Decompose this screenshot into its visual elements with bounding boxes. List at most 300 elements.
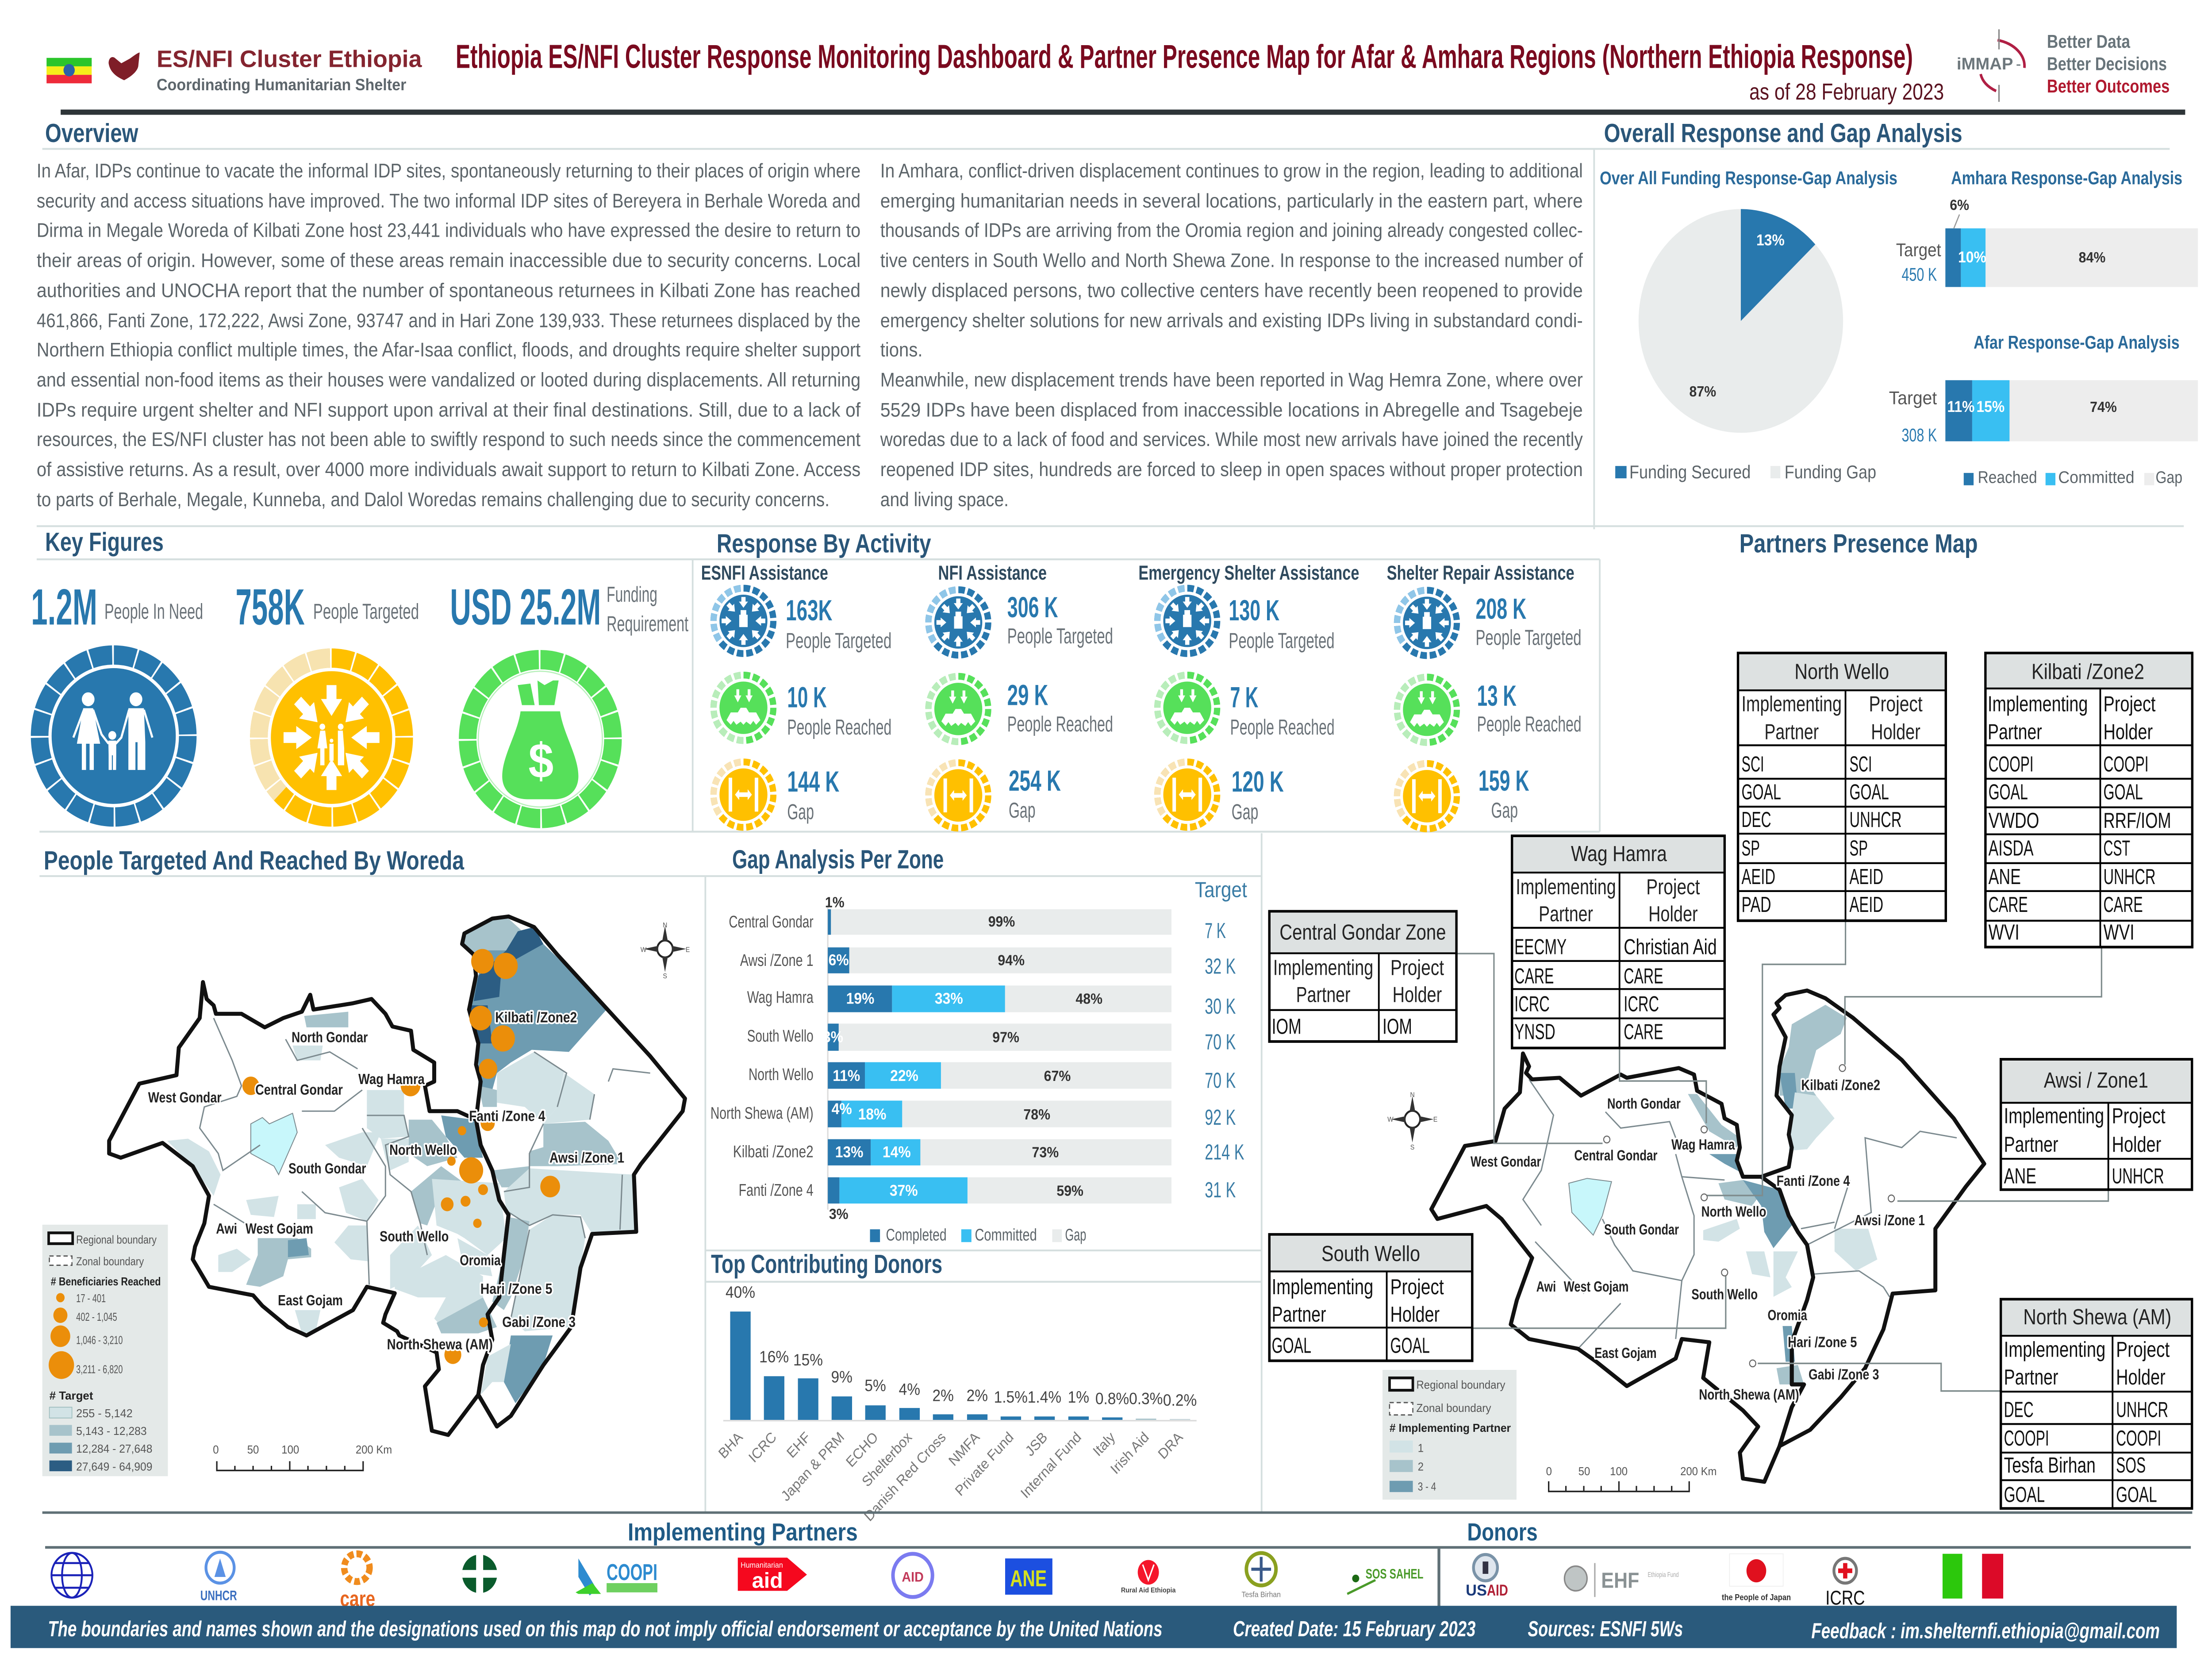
text block: Amhara situation: tive centers in South Wello and North Shewa Zone. In response to the increased number of	[880, 250, 1583, 272]
table: North Shewa: GOAL	[2004, 1483, 2045, 1507]
logo: circle seal: AID	[902, 1569, 924, 1585]
bar chart: Amhara: 10%	[1958, 249, 1986, 266]
map labels: Awsi /Zone 1	[549, 1149, 624, 1166]
bar chart: Amhara: Target	[1896, 240, 1941, 260]
key figure: people targeted: 758K	[236, 579, 305, 635]
icon: compass: E	[686, 946, 690, 954]
map labels: partner map: West Gojam	[1564, 1278, 1628, 1295]
map labels: South Gondar	[288, 1160, 366, 1177]
bar chart: donors: 9%	[831, 1368, 853, 1386]
column: NFI assistance: People Targeted	[1007, 624, 1113, 648]
table: Wag Hamra: Implementing	[1516, 875, 1616, 899]
icon: compass: W	[641, 946, 647, 954]
text block: Afar situation: authorities and UNOCHA report that the number of spontaneous returnees in Kilbati Zone has reached	[37, 280, 860, 302]
heading: key figures: Key Figures	[45, 528, 164, 557]
map labels: Wag Hamra	[358, 1071, 425, 1087]
target values: 214 K	[1205, 1140, 1244, 1164]
bar chart: Amhara	[1896, 168, 2198, 287]
table: Wag Hamra: Holder	[1648, 902, 1698, 926]
bar chart: donors: 16%	[759, 1348, 789, 1366]
map legend: 3,211 - 6,820	[76, 1363, 123, 1376]
map legend: Zonal boundary	[76, 1255, 144, 1268]
table: Wag Hamra: Christian Aid	[1624, 935, 1717, 959]
table: Kilbati Zone2: VWDO	[1989, 808, 2039, 832]
column: emergency shelter assistance: 7 K	[1230, 681, 1258, 714]
map legend: 27,649 - 64,909	[76, 1460, 152, 1473]
panel: overall response and gap analysis	[1600, 119, 2198, 487]
bar chart: donors: 0.3%	[1129, 1390, 1163, 1408]
text block: Amhara situation: reopened IDP sites, hundreds are forced to sleep in open spaces without proper protection	[880, 458, 1583, 481]
table: Wag Hamra: CARE	[1514, 964, 1554, 988]
key figure: funding requirement: USD 25.2M	[450, 579, 601, 635]
map labels: Hari /Zone 5	[480, 1280, 552, 1297]
map labels: partner map: Fanti /Zone 4	[1777, 1173, 1850, 1189]
icon: compass partner map: E	[1433, 1116, 1437, 1123]
panel: top contributing donors	[711, 1250, 1197, 1524]
stacked bar chart: gap by zone: 59%	[1056, 1182, 1083, 1199]
table: North Wello: Implementing	[1742, 692, 1842, 716]
logo: red figure: Rural Aid Ethiopia	[1121, 1586, 1176, 1594]
stacked bar chart: gap by zone	[710, 894, 1171, 1222]
table: Central Gondar Zone: Central Gondar Zone	[1279, 920, 1446, 944]
table: Wag Hamra: CARE	[1624, 1020, 1663, 1044]
map labels: Fanti /Zone 4	[469, 1107, 545, 1124]
map legend: 12,284 - 27,648	[76, 1442, 152, 1456]
key figure: funding requirement: Requirement	[607, 611, 688, 636]
text block: Afar situation: IDPs require urgent shelter and NFI support upon arrival at their final destinations. Still, due to a lack of	[37, 399, 860, 421]
logo: humanitarian aid: Humanitarian	[741, 1561, 783, 1569]
table: Kilbati Zone2: CST	[2103, 836, 2130, 860]
map labels: partner map: Central Gondar	[1574, 1147, 1657, 1164]
panel: response by activity	[701, 529, 1582, 829]
logo: humanitarian aid: aid	[752, 1569, 783, 1592]
column: NFI assistance: 254 K	[1009, 765, 1061, 797]
stacked bar chart: gap by zone: 48%	[1075, 990, 1102, 1007]
text block: Afar situation: to parts of Berhale, Megale, Kunneba, and Dalol Woredas remains challenging due to security concerns.	[37, 488, 830, 511]
table: Kilbati Zone2: Partner	[1988, 720, 2042, 744]
bar chart: donors: Japan & PRM	[778, 1429, 847, 1504]
heading: response by activity: Response By Activity	[717, 529, 931, 558]
disclaimer: The boundaries and names shown and the designations used on this map do not imply official endorsement or acceptance by the United Nations	[48, 1617, 1163, 1641]
map legend: # Beneficiaries Reached	[51, 1275, 161, 1288]
key figure: people in need: 1.2M	[31, 579, 97, 635]
stacked bar chart: gap by zone: 73%	[1032, 1144, 1059, 1161]
pie legend: Funding Secured	[1629, 462, 1751, 482]
bar chart: donors: Italy	[1090, 1429, 1118, 1459]
column: ESNFI assistance: 10 K	[787, 681, 827, 714]
bar chart: Amhara: 84%	[2079, 249, 2105, 265]
icon: compass: S	[663, 972, 667, 980]
logo: ICRC	[1825, 1558, 1865, 1609]
stacked bar chart: gap by zone: 3%	[829, 1206, 849, 1222]
map labels: West Gondar	[148, 1089, 222, 1106]
scale bar: 0	[213, 1443, 219, 1456]
scale bar partner map: 50	[1578, 1465, 1590, 1478]
table: Kilbati Zone2: Implementing	[1988, 692, 2088, 716]
map labels: partner map: North Wello	[1701, 1203, 1766, 1220]
stacked bar chart: gap by zone: 22%	[890, 1068, 918, 1084]
key figure: funding requirement: Funding	[607, 582, 657, 606]
heading: top donors: Top Contributing Donors	[711, 1250, 942, 1279]
logo: iMMAP	[1957, 29, 2170, 102]
target column heading: Target	[1195, 878, 1247, 902]
cluster name: ES/NFI Cluster Ethiopia	[157, 46, 422, 72]
text block: Afar situation: security and access situations have improved. The two informal IDP sites of Bereyera in Berhale Woreda and	[37, 190, 860, 212]
icon: compass	[641, 921, 690, 980]
table: North Wello: Project	[1869, 692, 1923, 716]
table: Wag Hamra: Partner	[1539, 902, 1593, 926]
table: Awsi Zone1: Implementing	[2004, 1104, 2104, 1128]
map legend	[42, 1225, 168, 1476]
stacked bar chart: gap by zone: Wag Hamra	[747, 988, 814, 1007]
text block: Afar situation: of assistive returns. As a result, over 4000 more individuals await support to return to Kilbati Zone. Access	[37, 458, 860, 481]
table: North Wello: Partner	[1764, 720, 1819, 744]
logo: EHF	[1564, 1563, 1679, 1597]
table: Kilbati Zone2: UNHCR	[2103, 865, 2155, 889]
column: shelter repair assistance: 13 K	[1477, 680, 1517, 712]
text block: Afar situation	[37, 160, 860, 511]
map labels: partner map: Awi	[1536, 1278, 1556, 1295]
panel: gap analysis per zone	[710, 845, 1247, 1244]
table: Wag Hamra: YNSD	[1514, 1020, 1555, 1044]
table: Central Gondar Zone: IOM	[1382, 1015, 1412, 1038]
stacked bar chart: gap by zone: 3%	[823, 1029, 843, 1046]
table: Awsi Zone1: Holder	[2112, 1132, 2161, 1157]
table: North Shewa: SOS	[2116, 1453, 2146, 1477]
pie legend: Funding Gap	[1785, 462, 1876, 482]
bar chart: donors: ICRC	[745, 1429, 780, 1466]
key figure: people targeted: People Targeted	[313, 600, 419, 623]
column: NFI assistance: 29 K	[1007, 679, 1048, 711]
table: Awsi Zone1	[2001, 1059, 2192, 1190]
text block: Amhara situation: emergency shelter solutions for new arrivals and existing IDPs living in substandard condi-	[880, 310, 1583, 332]
map legend: 17 - 401	[76, 1292, 106, 1305]
table: Central Gondar Zone	[1269, 911, 1456, 1042]
stacked bar chart: gap by zone: 67%	[1044, 1068, 1071, 1084]
table: South Wello: Implementing	[1272, 1275, 1373, 1299]
bar chart: donors: 0.2%	[1163, 1392, 1197, 1409]
table: Awsi Zone1: Project	[2112, 1104, 2166, 1128]
logo: USAID: US	[1466, 1582, 1487, 1599]
logo: olive ring: Tesfa Birhan	[1242, 1590, 1281, 1599]
report date: as of 28 February 2023	[1749, 79, 1944, 104]
bar chart: donors: NMFA	[945, 1428, 983, 1469]
table: Kilbati Zone2: CARE	[1989, 892, 2028, 916]
table: North Shewa: DEC	[2004, 1398, 2034, 1422]
bar chart: donors: Danish Red Cross	[861, 1429, 949, 1524]
map labels: partner map: South Gondar	[1604, 1221, 1679, 1238]
map legend: 402 - 1,045	[76, 1311, 117, 1323]
logo: SOS Sahel	[1347, 1566, 1423, 1594]
logo: EHF: EHF	[1601, 1569, 1639, 1592]
gap chart legend: Completed	[886, 1225, 947, 1244]
column: ESNFI assistance: 144 K	[787, 766, 839, 798]
logo: CARE: care	[340, 1587, 375, 1611]
logo: ICRC: ICRC	[1825, 1587, 1865, 1609]
table: North Wello: UNHCR	[1849, 808, 1901, 832]
bar chart: donors: 1%	[1068, 1388, 1089, 1406]
scale bar: 100	[281, 1443, 299, 1456]
table: Kilbati Zone2: AISDA	[1989, 836, 2034, 860]
bar chart: donors: Internal Fund	[1018, 1429, 1084, 1501]
logo: circle seal	[893, 1554, 933, 1597]
bar chart: Amhara: Amhara Response-Gap Analysis	[1951, 168, 2182, 188]
target values: 7 K	[1205, 919, 1226, 943]
scale bar partner map: 100	[1610, 1465, 1628, 1478]
key figure: people in need	[31, 579, 203, 635]
partner map legend: # Implementing Partner	[1390, 1422, 1511, 1434]
scale bar partner map	[1546, 1465, 1717, 1492]
icon: targeted people	[259, 658, 404, 817]
map labels: partner map: North Shewa (AM)	[1699, 1386, 1799, 1403]
bar chart: donors: Irish Aid	[1107, 1429, 1152, 1477]
column: ESNFI assistance: Gap	[787, 800, 814, 824]
logo: Japan	[1722, 1554, 1791, 1602]
table: South Wello: Partner	[1272, 1302, 1326, 1327]
stacked bar chart: gap by zone: 94%	[998, 952, 1025, 969]
text block: Amhara situation	[880, 160, 1583, 511]
table: North Wello: North Wello	[1794, 660, 1889, 684]
table: North Shewa: UNHCR	[2116, 1398, 2168, 1422]
map labels: partner map: Kilbati /Zone2	[1801, 1077, 1880, 1093]
map legend: 5,143 - 12,283	[76, 1425, 147, 1438]
connector lines	[1456, 921, 2108, 1391]
bar chart: donors: DRA	[1155, 1428, 1186, 1462]
stacked bar chart: gap by zone: 18%	[858, 1106, 887, 1123]
map labels: Kilbati /Zone2	[495, 1009, 577, 1026]
stacked bar chart: gap by zone: 13%	[835, 1144, 864, 1161]
map labels: partner map: Wag Hamra	[1671, 1136, 1735, 1153]
column: NFI assistance	[929, 562, 1113, 828]
stacked bar chart: gap by zone: 99%	[988, 913, 1015, 930]
map labels: East Gojam	[278, 1292, 343, 1309]
map labels: Oromia	[460, 1252, 501, 1269]
icon: compass partner map: N	[1410, 1091, 1415, 1099]
bar chart: Amhara: 450 K	[1901, 265, 1937, 285]
logo: Japan: the People of Japan	[1722, 1592, 1791, 1602]
icon: Ethiopia flag	[46, 58, 92, 83]
logo: iMMAP: -	[2016, 54, 2021, 73]
bar chart: donors: 2%	[967, 1387, 988, 1405]
table: Wag Hamra	[1512, 836, 1724, 1048]
column: ESNFI assistance: People Targeted	[786, 629, 891, 653]
column: shelter repair assistance: Gap	[1491, 798, 1518, 823]
bar chart: donors: 1.5%	[994, 1388, 1028, 1406]
text block: Afar situation: their areas of origin. However, some of these areas remain inaccessible due to security concerns. Local	[37, 250, 860, 272]
table: Central Gondar Zone: Holder	[1393, 983, 1442, 1007]
bar legend: Gap	[2155, 468, 2182, 487]
logo: green cross	[462, 1554, 497, 1594]
map labels: partner map: East Gojam	[1594, 1345, 1657, 1361]
footer	[11, 1606, 2177, 1648]
bar chart: donors: JSB	[1022, 1429, 1050, 1459]
table: North Wello: DEC	[1742, 808, 1771, 832]
stacked bar chart: gap by zone: 4%	[832, 1101, 852, 1118]
map: partner presence	[1431, 991, 1984, 1482]
sources: Sources: ESNFI 5Ws	[1528, 1617, 1683, 1641]
panel: donors	[1466, 1519, 2003, 1609]
icon: compass: N	[663, 921, 667, 929]
column: emergency shelter assistance: Gap	[1232, 800, 1258, 824]
stacked bar chart: gap by zone: 33%	[935, 990, 963, 1007]
map labels: Gabi /Zone 3	[502, 1314, 576, 1330]
target values: 70 K	[1205, 1069, 1236, 1092]
logo: olive ring	[1242, 1553, 1281, 1599]
table: Awsi Zone1: Awsi / Zone1	[2044, 1068, 2148, 1092]
column: shelter repair assistance: 208 K	[1475, 593, 1526, 625]
map labels: South Wello	[380, 1228, 449, 1245]
table: Kilbati Zone2: COOPI	[2103, 752, 2149, 776]
bar chart: donors: Shelterbox	[859, 1429, 915, 1490]
panel: implementing partners	[51, 1519, 1423, 1611]
text block: Afar situation: resources, the ES/NFI cluster has not been able to swiftly respond to such needs since the commencement	[37, 428, 860, 450]
stacked bar chart: gap by zone: Awsi /Zone 1	[740, 951, 814, 969]
bar chart: Afar: 11%	[1947, 399, 1974, 415]
heading: implementing partners: Implementing Partners	[628, 1519, 858, 1546]
table: South Wello: GOAL	[1272, 1334, 1311, 1357]
table: South Wello	[1269, 1234, 1472, 1361]
bar chart: Afar: Target	[1889, 388, 1937, 408]
column: shelter repair assistance: People Reached	[1477, 712, 1582, 736]
table: North Wello: SCI	[1742, 752, 1764, 776]
table: Kilbati Zone2: Holder	[2103, 720, 2153, 744]
map labels: partner map: North Gondar	[1607, 1095, 1681, 1112]
logo: USAID	[1466, 1554, 1508, 1599]
logo: IOM	[51, 1553, 92, 1598]
bar chart: donors: 1.4%	[1028, 1388, 1061, 1406]
text block: Amhara situation: 5529 IDPs have been displaced from inaccessible locations in Abregelle and Tsagebeje	[880, 399, 1583, 421]
icon: family	[40, 655, 188, 817]
table: North Wello: AEID	[1849, 892, 1883, 916]
table: North Shewa: Implementing	[2004, 1338, 2105, 1361]
table: South Wello: Holder	[1390, 1302, 1440, 1327]
bar chart: donors: EHF	[783, 1429, 813, 1461]
table: Awsi Zone1: Partner	[2004, 1132, 2058, 1157]
heading: funding pie: Over All Funding Response-Gap Analysis	[1600, 168, 1897, 188]
table: North Shewa: GOAL	[2116, 1483, 2157, 1507]
bar chart: donors: ECHO	[843, 1429, 881, 1470]
table: Kilbati Zone2: GOAL	[1989, 780, 2028, 804]
column: ESNFI assistance	[701, 562, 891, 827]
column: shelter repair assistance	[1387, 562, 1582, 829]
logo: iMMAP: Better Data	[2047, 32, 2131, 52]
table: North Shewa: Project	[2116, 1338, 2170, 1361]
table: North Shewa: North Shewa (AM)	[2023, 1305, 2171, 1329]
table: Central Gondar Zone: IOM	[1272, 1015, 1302, 1038]
icon: money bag: $	[529, 733, 553, 788]
bar chart: donors: 40%	[726, 1283, 755, 1301]
stacked bar chart: gap by zone: North Shewa (AM)	[710, 1104, 814, 1123]
column: emergency shelter assistance	[1138, 562, 1359, 827]
pie chart: funding: 87%	[1690, 383, 1716, 400]
text block: Amhara situation: Meanwhile, new displacement trends have been reported in Wag Hemra Zone, where over	[880, 369, 1583, 391]
text block: Amhara situation: and living space.	[880, 488, 1009, 511]
table: North Wello: AEID	[1849, 865, 1883, 889]
table: North Wello: GOAL	[1849, 780, 1889, 804]
bar chart: donors: 2%	[933, 1387, 954, 1405]
logo: CARE	[340, 1554, 375, 1611]
panel: people targeted and reached by woreda	[42, 846, 690, 1476]
stacked bar chart: gap by zone: Central Gondar	[729, 912, 814, 931]
logo: SOS Sahel: SOS SAHEL	[1366, 1566, 1423, 1582]
text block: Afar situation: Dirma in Megale Woreda of Kilbati Zone host 23,441 individuals who have expressed the desire to return to	[37, 219, 860, 242]
table: Wag Hamra: Project	[1646, 875, 1700, 899]
map labels: North Gondar	[292, 1029, 368, 1046]
table: North Wello: SP	[1742, 836, 1760, 860]
text block: Amhara situation: emerging humanitarian needs in several locations, particularly in the eastern part, where	[880, 190, 1583, 212]
stacked bar chart: gap by zone: 37%	[890, 1182, 918, 1200]
scale bar	[213, 1443, 392, 1470]
heading: people targeted map: People Targeted And Reached By Woreda	[44, 846, 464, 876]
scale bar partner map: 0	[1546, 1465, 1552, 1478]
logo: iMMAP: Better Decisions	[2047, 54, 2167, 74]
heading: gap analysis: Gap Analysis Per Zone	[732, 845, 944, 874]
column: emergency shelter assistance: Emergency Shelter Assistance	[1138, 562, 1359, 584]
logo: iMMAP: iMMAP	[1957, 54, 2013, 73]
logo: ANE	[1005, 1558, 1052, 1595]
text block: Amhara situation: woredas due to a lack of food and services. While most new arrivals have joined the recently	[880, 428, 1583, 450]
icon: compass partner map	[1387, 1091, 1437, 1151]
table: North Shewa: COOPI	[2004, 1426, 2049, 1450]
bar chart: Afar: 15%	[1976, 399, 2005, 415]
header	[46, 29, 2170, 104]
target values: 70 K	[1205, 1030, 1236, 1054]
bar legend	[1964, 468, 2182, 487]
partner map legend: 2	[1418, 1460, 1424, 1473]
icon: shelter cluster logo	[109, 53, 140, 80]
text block: Amhara situation: thousands of IDPs are arriving from the Oromia region and joining already congested collec-	[880, 219, 1583, 242]
panel: partners presence map	[1269, 529, 2192, 1508]
bar chart: donors: 15%	[793, 1351, 823, 1369]
table: North Shewa: COOPI	[2116, 1426, 2161, 1450]
table: Kilbati Zone2: WVI	[2103, 920, 2135, 944]
stacked bar chart: gap by zone: 1%	[825, 894, 845, 911]
column: emergency shelter assistance: People Targeted	[1229, 629, 1335, 653]
partner map legend: Regional boundary	[1417, 1379, 1505, 1392]
table: Wag Hamra: EECMY	[1514, 935, 1567, 959]
partner map legend: 1	[1418, 1442, 1424, 1455]
table: Kilbati Zone2: GOAL	[2103, 780, 2143, 804]
map labels: Central Gondar	[255, 1081, 343, 1098]
table: North Wello: AEID	[1742, 865, 1775, 889]
bar chart: donors: Private Fund	[952, 1429, 1016, 1499]
map labels: partner map	[1471, 1077, 1925, 1403]
table: Kilbati Zone2: WVI	[1989, 920, 2020, 944]
map labels	[148, 1009, 624, 1353]
text block: Afar situation: 461,866, Fanti Zone, 172,222, Awsi Zone, 93747 and in Hari Zone 139,933. These returnees displaced by the	[37, 310, 860, 332]
table: North Wello: Holder	[1871, 720, 1920, 744]
gap chart legend: Committed	[975, 1225, 1037, 1244]
key figure: people in need: People In Need	[104, 600, 203, 623]
pie chart: funding	[1639, 209, 1843, 433]
map legend: 1,046 - 3,210	[76, 1334, 123, 1347]
heading: partners map: Partners Presence Map	[1740, 529, 1978, 558]
stacked bar chart: gap by zone: Fanti /Zone 4	[739, 1180, 814, 1200]
column: NFI assistance: People Reached	[1007, 712, 1113, 736]
target values: 30 K	[1205, 994, 1236, 1019]
panel: overview	[37, 119, 1583, 511]
bar chart: donors: 0.8%	[1095, 1390, 1129, 1408]
map legend: # Target	[50, 1389, 93, 1402]
map labels: Awi	[216, 1220, 237, 1237]
logo: COOPI: COOPI	[607, 1559, 657, 1585]
column: shelter repair assistance: People Targeted	[1475, 626, 1582, 650]
table: South Wello: Project	[1390, 1275, 1444, 1299]
column: ESNFI assistance: People Reached	[787, 715, 891, 739]
table: North Shewa: Holder	[2116, 1365, 2166, 1389]
bar chart: Afar: 308 K	[1901, 425, 1937, 446]
table: South Wello: GOAL	[1390, 1334, 1430, 1357]
